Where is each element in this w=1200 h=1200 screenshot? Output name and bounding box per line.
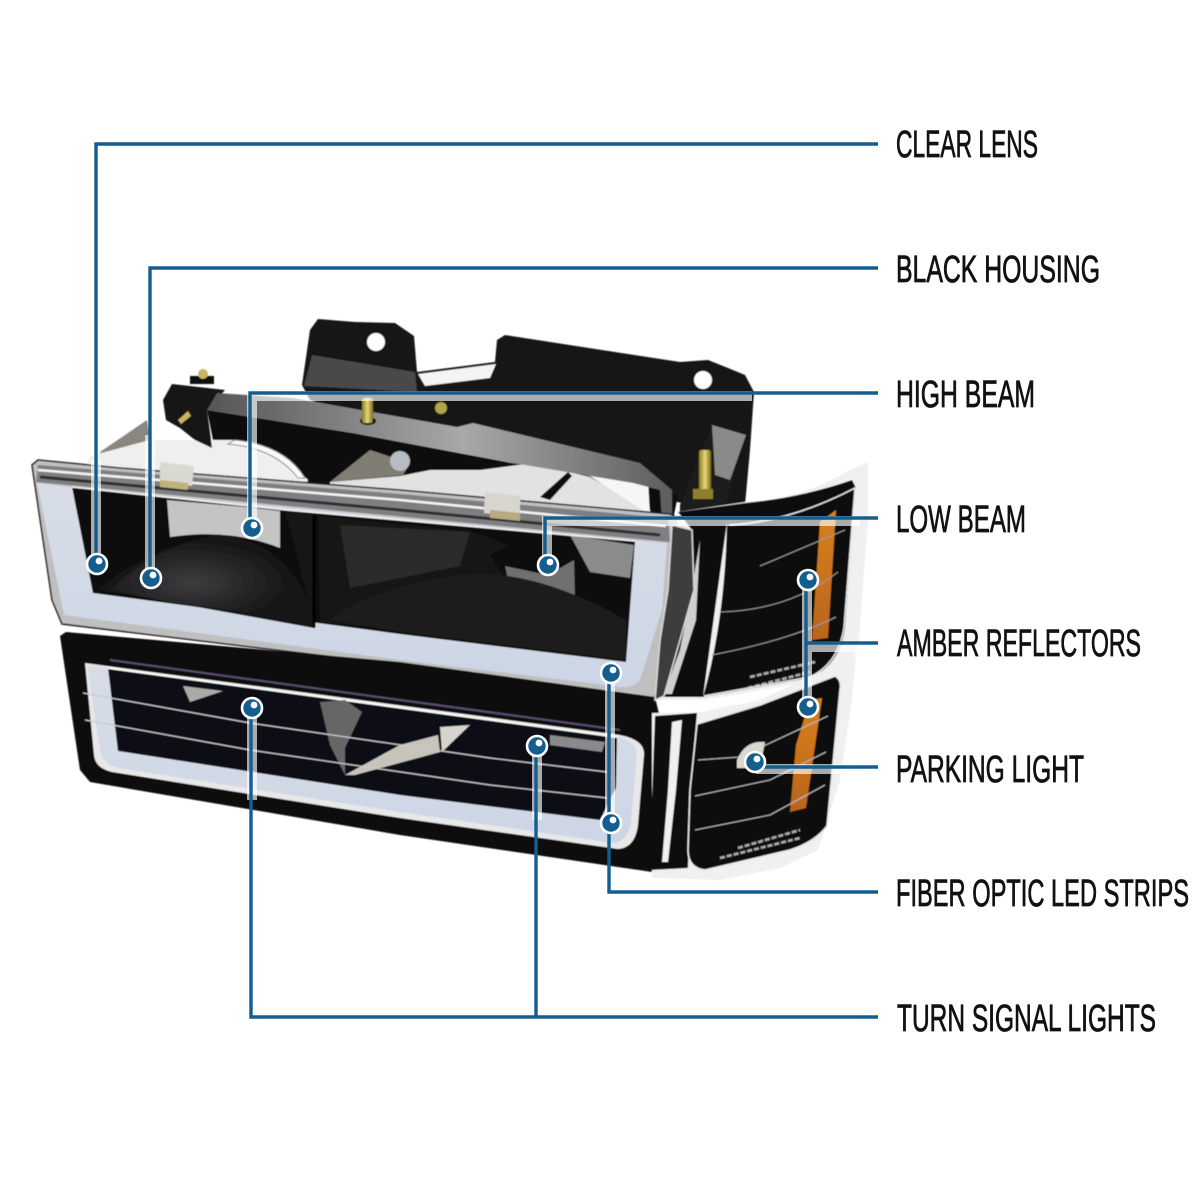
headlight assembly photo [32,319,868,880]
lower main lamp [60,632,660,872]
callout: clear lens: CLEAR LENS [896,124,1038,166]
rear stud tower [680,425,746,515]
callout: black housing: BLACK HOUSING [896,249,1100,291]
inner reflector detail [167,500,280,548]
marker dots [87,518,818,833]
center chrome hinge [655,525,694,700]
crossbar bracket [163,369,672,522]
silver reflector bowls [85,420,655,530]
upper headlamp frame [32,460,695,698]
lens window [72,487,635,662]
rear mounting bracket [302,319,754,505]
callout: parking light: PARKING LIGHT [896,749,1084,791]
callout: fiber optic led strips [609,673,1189,915]
callout: high beam [250,374,1035,528]
callout: low beam: LOW BEAM [896,499,1026,541]
callout: clear lens [96,124,1038,564]
callout: amber reflectors [806,580,1141,706]
callout: turn signal lights [251,708,1156,1040]
callout: low beam [545,499,1026,564]
callout: high beam: HIGH BEAM [896,374,1035,416]
lower corner lamp [650,655,856,880]
callout leader lines halos [96,396,860,823]
light strip [37,483,667,687]
upper corner lamp [654,462,868,700]
dark lamp cavity [207,410,678,525]
callout: black housing [150,249,1100,578]
